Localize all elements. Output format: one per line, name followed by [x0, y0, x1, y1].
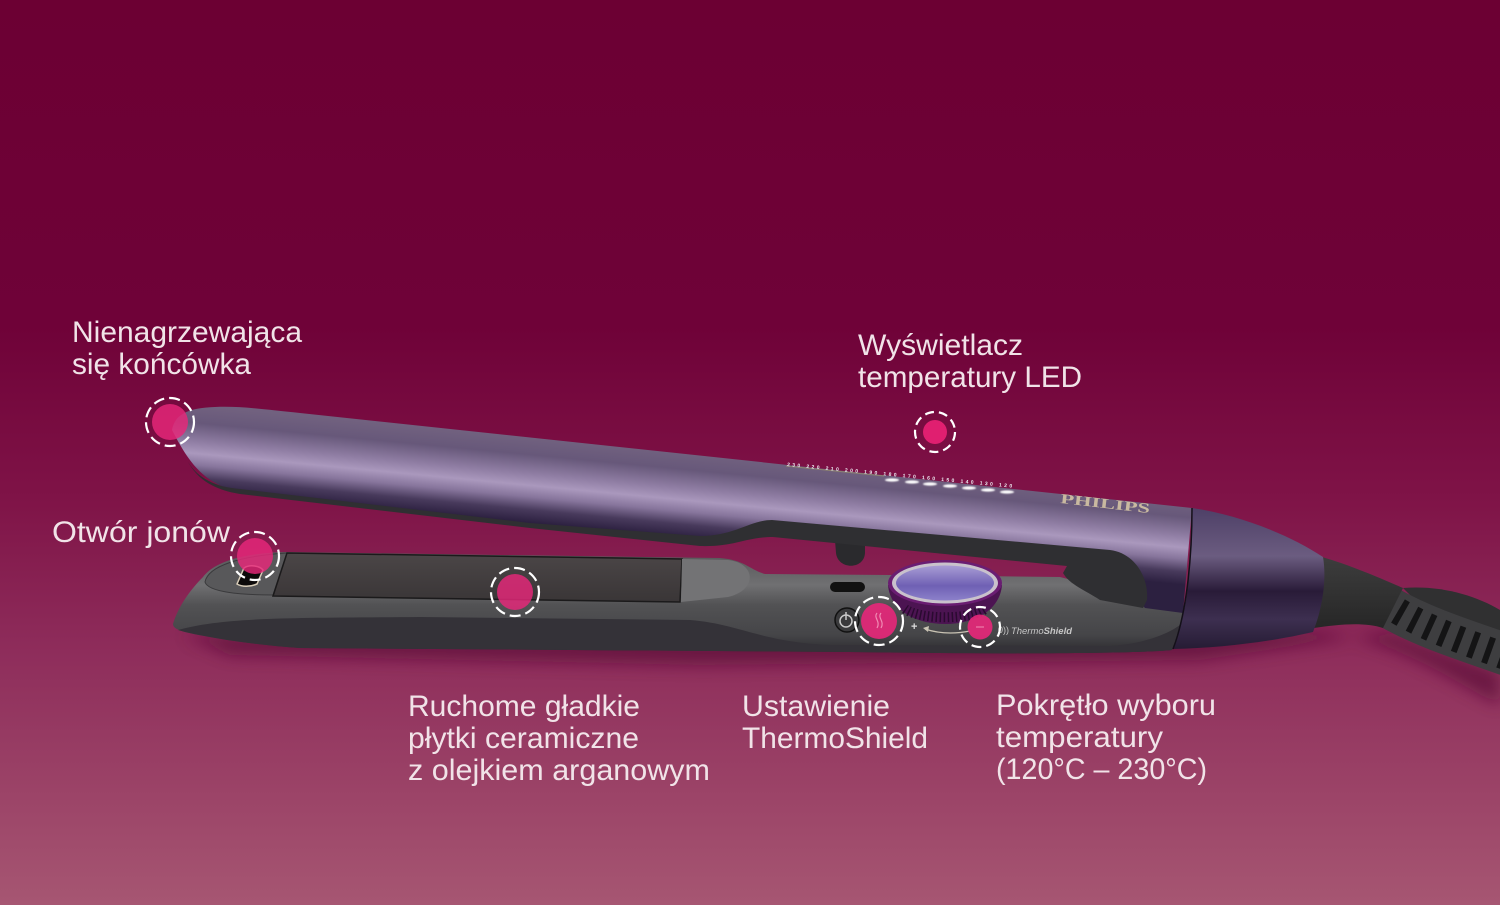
- hotspot: non-heating tip: [146, 398, 194, 446]
- ion outlet opening: [237, 566, 263, 586]
- lower arm body: [173, 552, 1186, 653]
- LED indicators: [885, 478, 1014, 494]
- label: LED display: temperatury LED: [858, 361, 1082, 394]
- ion outlet recess: [205, 553, 287, 595]
- hotspot: temperature dial: [960, 607, 1000, 647]
- label: ceramic plates: z olejkiem arganowym: [408, 754, 710, 787]
- handle seam: [1173, 508, 1192, 649]
- hotspot: LED temperature display: [915, 412, 955, 452]
- ceramic plate: [273, 553, 682, 602]
- power button: [835, 608, 859, 632]
- hotspot: ThermoShield setting: [855, 597, 903, 645]
- label: non-heating tip: Nienagrzewająca: [72, 316, 303, 349]
- label: ThermoShield setting: ThermoShield: [742, 722, 928, 755]
- temperature direction marks: [911, 621, 970, 633]
- label: temperature dial: temperatury: [996, 721, 1163, 754]
- drop shadow under the straightener: [185, 632, 1500, 705]
- temperature direction marks: +: [911, 621, 917, 633]
- label: non-heating tip: się końcówka: [72, 348, 252, 381]
- label: ion outlet: Otwór jonów: [52, 516, 231, 549]
- hotspot: ceramic plates: [491, 568, 539, 616]
- temperature dial: [888, 560, 1002, 624]
- upper arm dark underside and hinge: [188, 462, 1147, 608]
- label: ceramic plates: płytki ceramiczne: [408, 722, 639, 755]
- label: ceramic plates: Ruchome gładkie: [408, 690, 640, 723]
- ventilation slot: [830, 582, 865, 592]
- temperature scale markings: 230 220 210 200 190 180 170 160 150 140 130 120: [787, 462, 1013, 490]
- upper arm purple barrel: [172, 407, 1192, 613]
- ThermoShield logo: 0)): [998, 625, 1009, 635]
- hotspot: ion outlet: [231, 532, 279, 580]
- label: temperature dial: Pokrętło wyboru: [996, 689, 1216, 722]
- label: ThermoShield setting: Ustawienie: [742, 690, 890, 723]
- Philips logo: PHILIPS: [1060, 492, 1151, 517]
- lower arm shaded base: [178, 617, 1180, 653]
- floating plate hinge cover: [681, 559, 750, 602]
- power cord: [1388, 587, 1500, 658]
- upper arm lock pin: [835, 540, 865, 566]
- label: LED display: Wyświetlacz: [858, 329, 1023, 362]
- handle end cap: [1173, 508, 1324, 649]
- cord collar: [1314, 557, 1403, 628]
- label: temperature dial: (120°C – 230°C): [996, 753, 1207, 786]
- hair straightener illustration: [172, 407, 1500, 658]
- ThermoShield logo: ThermoShield: [1011, 626, 1072, 637]
